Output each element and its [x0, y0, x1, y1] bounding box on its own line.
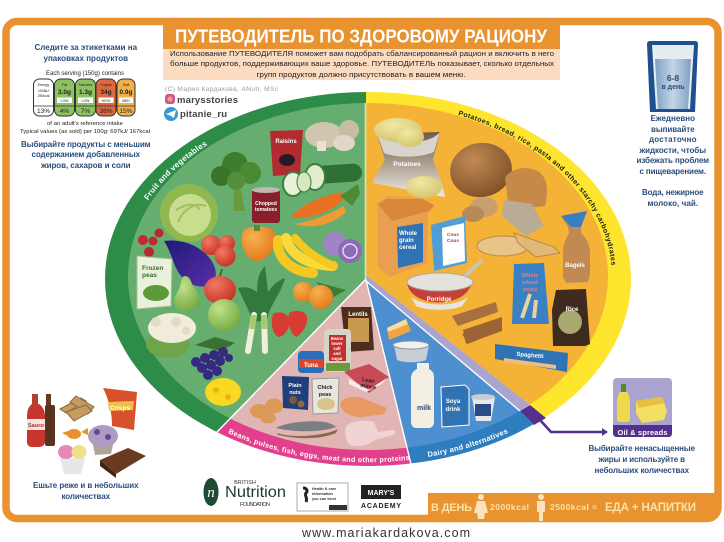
panel: daily energy band: В ДЕНЬ [431, 502, 472, 514]
traffic light nutrition label [34, 79, 135, 116]
logo: Mary's Academy: ACADEMY [361, 503, 401, 510]
beans can: lower [332, 341, 343, 346]
panel: oil and spreads: Выбирайте ненасыщенные [588, 444, 696, 453]
traffic light nutrition label: 1.3g [79, 89, 92, 96]
sweet [62, 428, 88, 439]
spaghetti pack: Spaghetti [516, 352, 544, 360]
logo: Mary's Academy [361, 485, 401, 510]
logo: health information badge: information [312, 492, 334, 496]
panel: food labels advice: Выбирайте продукты с меньшим [21, 140, 151, 149]
group: dairy foods [387, 319, 495, 428]
tuna can [298, 351, 324, 373]
flatbreads [477, 233, 560, 257]
lean mince pack [344, 364, 389, 393]
panel: daily energy band: 2000kcal [490, 502, 529, 512]
yoghurt pot [393, 341, 429, 362]
traffic light nutrition label: MED [122, 99, 130, 103]
porridge bowl: Porridge [427, 297, 452, 303]
traffic light nutrition label: 0.9g [119, 89, 133, 96]
panel: food labels advice: содержанием добавленных [32, 150, 141, 159]
traffic light nutrition label: 7% [81, 108, 90, 115]
traffic light nutrition label: Energy [38, 83, 49, 87]
muffin [88, 425, 118, 455]
rice bag: Rice [566, 307, 579, 313]
frozen peas bag: Frozen [142, 265, 163, 272]
whole wheat pasta [512, 263, 549, 324]
chopped tomatoes can: Chopped [255, 201, 277, 207]
chicken [345, 421, 395, 446]
chopped tomatoes can: tomatoes [255, 207, 277, 213]
eatwell plate [105, 92, 631, 466]
soya drink carton: Soya [446, 399, 461, 405]
bread loaves [446, 138, 547, 236]
group: starchy foods [373, 118, 590, 372]
traffic light nutrition label: 38% [99, 108, 113, 115]
traffic light nutrition label: Saturates [79, 83, 93, 87]
yoghurt cup [471, 394, 495, 421]
icon: man [537, 494, 545, 521]
cherries [138, 228, 164, 257]
sweetcorn [205, 378, 241, 406]
panel: water: избежать проблем [636, 156, 710, 165]
whole grain cereal box [377, 196, 435, 277]
traffic light nutrition label: 4% [60, 108, 69, 115]
panel: daily energy band: 2500kcal = [550, 502, 597, 512]
traffic light nutrition label: LOW [82, 99, 90, 103]
grapes [191, 337, 235, 380]
chick peas bag: Chick [318, 385, 333, 391]
traffic light nutrition label: 1046kJ [38, 89, 49, 93]
panel: water: Ежедневно [650, 114, 696, 123]
lean mince pack: mince [360, 383, 377, 391]
rice bag [552, 289, 590, 346]
green apple [208, 299, 240, 331]
logo: British Nutrition Foundation: Nutrition [225, 484, 286, 501]
panel: food labels advice [20, 43, 151, 170]
cucumber [283, 163, 363, 196]
bagels bag: Bagels [565, 263, 585, 269]
aubergine [164, 241, 216, 287]
plain nuts bag [282, 376, 309, 410]
cous cous box: Cous [447, 238, 459, 244]
carrots [290, 184, 360, 226]
porridge bowl [407, 260, 482, 310]
orange pepper [242, 225, 275, 261]
sector: proteins [217, 280, 410, 466]
panel: water: Вода, нежирное [642, 188, 704, 197]
bananas [278, 238, 334, 273]
panel: food labels advice: упаковках продуктов [44, 54, 128, 63]
panel: water [636, 41, 710, 208]
traffic light nutrition label: 13% [37, 108, 50, 115]
cauliflower [146, 313, 196, 358]
panel: oil and spreads: Oil & spreads [618, 428, 668, 437]
group: protein foods [250, 307, 395, 446]
panel: daily energy band: ЕДА + НАПИТКИ [605, 502, 696, 514]
group: fruit and vegetable foods [137, 120, 363, 406]
icon: glass of water: в день [661, 84, 685, 91]
credits and social handles [164, 86, 279, 121]
credits and social handles: pitanie_ru [180, 109, 227, 120]
credits and social handles: (C) Мария Кардакова, ANutr, MSc [165, 86, 279, 93]
bagels bag [561, 211, 590, 283]
traffic light nutrition label: 34g [100, 89, 112, 96]
website url: www.mariakardakova.com [301, 526, 470, 540]
cous cous box [431, 216, 467, 271]
broccoli [211, 152, 261, 211]
whole wheat pasta: pasta [523, 287, 538, 293]
beans can: sugar [331, 356, 343, 361]
red apple [204, 269, 236, 304]
leek [238, 266, 285, 351]
traffic light nutrition label: 15% [119, 108, 133, 115]
chocolate bar [100, 448, 146, 478]
label: carbohydrates: Potatoes, bread, rice, pasta and other starchy carbohydrates [458, 110, 616, 266]
frozen peas bag [137, 256, 172, 309]
intro text block: групп продуктов должно присутствовать в вашем меню. [256, 72, 466, 79]
spread tub [636, 397, 667, 423]
wheat bars [452, 302, 502, 344]
sector: oils strip [366, 275, 530, 410]
logo: health information badge [297, 483, 348, 511]
panel: foods high in fat and sugar [27, 388, 146, 501]
panel: daily energy band [428, 493, 718, 522]
panel: water: жидкости, чтобы [638, 146, 706, 155]
chick peas bag [312, 378, 339, 414]
sack of potatoes: Potatoes [393, 161, 421, 168]
frozen peas bag: peas [142, 272, 157, 279]
tomatoes [201, 235, 236, 266]
sauce bottles: Sauce [28, 423, 44, 429]
logo: British Nutrition Foundation: n [207, 485, 215, 501]
traffic light nutrition label: Salt [123, 82, 130, 87]
arrow to oils [540, 420, 608, 436]
traffic light nutrition label: 3.0g [58, 89, 71, 96]
clementines [293, 282, 346, 309]
beans can: salt [333, 346, 341, 351]
strawberries [272, 311, 307, 337]
plain nuts bag: nuts [289, 390, 301, 396]
traffic light nutrition label: HIGH [102, 99, 111, 103]
intro text block: больше продуктов, поддерживающих ваше здоровье. ПУТЕВОДИТЕЛЬ показывает, сколько отдельных [170, 60, 555, 68]
cous cous box: Cous [447, 232, 459, 238]
sector: dairy [368, 283, 534, 464]
chopped tomatoes can [252, 187, 280, 223]
intro text block: Использование ПУТЕВОДИТЕЛЯ поможет вам подобрать сбалансированный рацион и включить в него [170, 50, 554, 58]
panel: foods high in fat and sugar: Ешьте реже и в небольших [33, 481, 139, 490]
mushrooms [305, 120, 359, 151]
whole grain cereal box: cereal [399, 245, 417, 251]
panel: food labels advice: of an adult's reference intake [47, 121, 123, 127]
raisins bag [270, 130, 303, 176]
title banner: ПУТЕВОДИТЕЛЬ ПО ЗДОРОВОМУ РАЦИОНУ [175, 26, 548, 46]
traffic light nutrition label: 250kcal [38, 94, 50, 98]
traffic light nutrition label: Sugars [100, 83, 112, 87]
red onion [323, 232, 362, 263]
logo: health information badge: you can trust [312, 497, 337, 501]
panel: oil and spreads: жиры и используйте в [598, 455, 686, 464]
panel: oil and spreads [540, 378, 696, 475]
oil bottle [617, 384, 630, 422]
cheese wedge [387, 319, 411, 340]
pear [174, 276, 200, 311]
whole grain cereal box: Whole [399, 231, 418, 237]
logo: Mary's Academy: MARY'S [368, 490, 395, 497]
panel: water: достаточно [649, 135, 697, 144]
milk bottle: milk [417, 405, 431, 412]
fish [276, 421, 338, 438]
panel: food labels advice: Следите за этикетками на [34, 43, 138, 52]
credits and social handles: marysstories [177, 95, 238, 106]
intro text block [163, 49, 560, 80]
panel: oil and spreads: небольших количествах [594, 466, 690, 475]
plain nuts bag: Plain [288, 383, 302, 389]
beans can [324, 329, 351, 372]
label: fruit and vegetables: Fruit and vegetables [144, 142, 207, 200]
lentils box: Lentils [348, 312, 368, 318]
icon: woman [474, 494, 488, 519]
biscuits [60, 396, 94, 421]
whole wheat pasta: Whole [522, 273, 538, 279]
panel: water: молоко, чай. [648, 199, 698, 208]
lean mince pack: Lean [361, 377, 376, 385]
tuna can: Tuna [304, 363, 319, 369]
traffic light nutrition label: Fat [62, 82, 68, 87]
sack of potatoes [373, 118, 445, 198]
sector: fruit and vegetables [105, 92, 366, 432]
logo: British Nutrition Foundation [204, 478, 286, 508]
beans can: Beans [331, 336, 344, 341]
sector: starchy carbohydrates [366, 92, 631, 418]
label: dairy: Dairy and alternatives [428, 430, 508, 457]
panel: food labels advice: Each serving (150g) contains [46, 71, 124, 77]
ice cream [58, 445, 86, 474]
traffic light nutrition label: LOW [61, 99, 69, 103]
spaghetti pack [495, 344, 568, 372]
crisps bag: Crisps [110, 405, 130, 412]
lentils box [341, 307, 374, 352]
oils marker [520, 405, 546, 425]
soya drink carton [441, 385, 469, 427]
label: proteins: Beans, pulses, fish, eggs, meat and other proteins [228, 428, 410, 464]
chick peas bag: peas [319, 392, 331, 398]
logo: British Nutrition Foundation: BRITISH [234, 480, 256, 486]
panel: food labels advice: жиров, сахаров и соли [40, 161, 131, 170]
soya drink carton: drink [446, 407, 461, 413]
eggs [250, 398, 283, 424]
whole wheat pasta: wheat [521, 280, 538, 286]
icon: glass of water: 6-8 [667, 73, 679, 83]
panel: foods high in fat and sugar: количествах [62, 492, 111, 501]
cabbage [160, 184, 218, 242]
raisins bag: Raisins [275, 139, 297, 145]
beans can: and [333, 351, 341, 356]
panel: water: с пищеварением. [640, 167, 706, 176]
logo: British Nutrition Foundation: FOUNDATION [240, 502, 270, 508]
icon: glass of water [647, 41, 698, 112]
panel: water: выпивайте [651, 125, 695, 134]
whole grain cereal box: grain [399, 238, 414, 244]
logo: health information badge: Health & care [312, 487, 336, 491]
salmon fillet [341, 397, 387, 417]
panel: food labels advice: Typical values (as sold) per 100g: 697kJ/ 167kcal [20, 129, 150, 135]
